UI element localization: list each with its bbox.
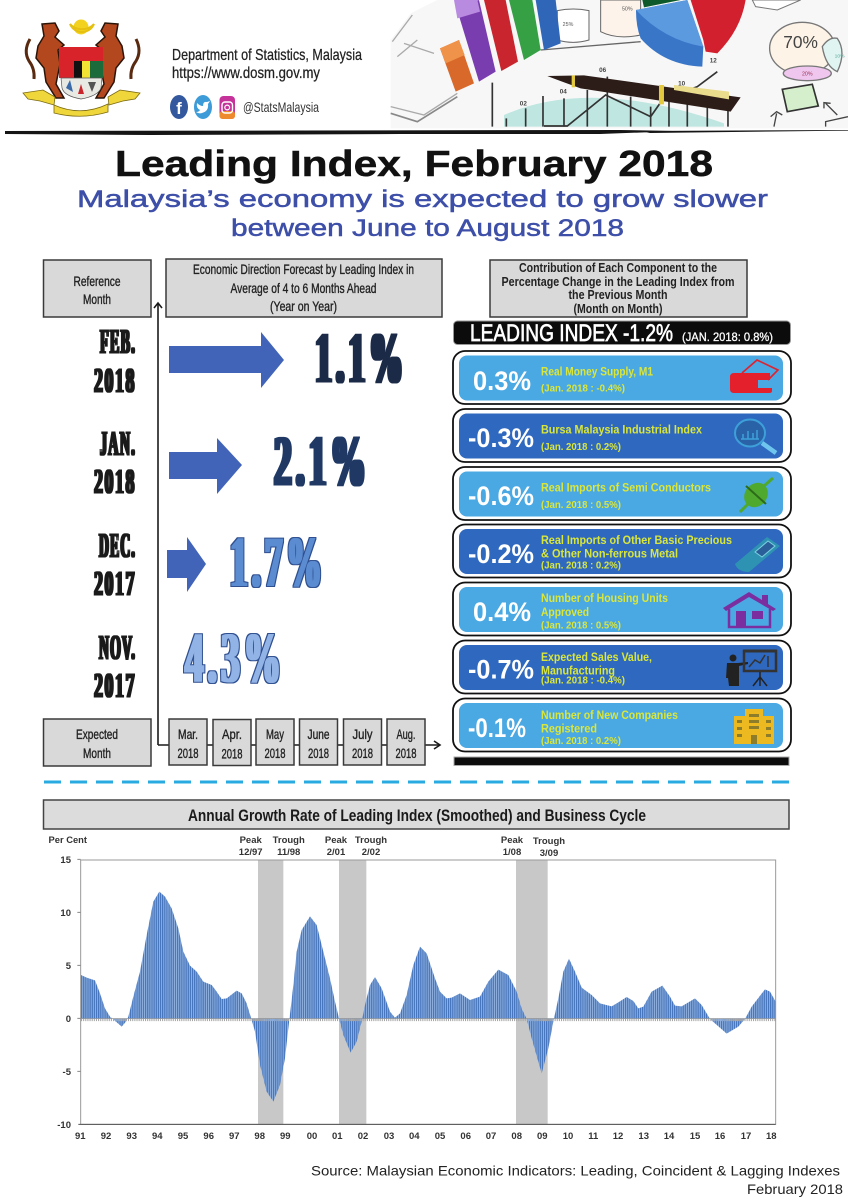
chart heading (44, 800, 789, 829)
decorative business chart photo: 50% (622, 7, 633, 13)
organisation name and website: https://www.dosm.gov.my (172, 65, 320, 82)
leading index banner: (JAN. 2018: 0.8%) (682, 330, 773, 344)
expected month timeline: 2018 (308, 745, 329, 761)
expected month timeline: Aug. (396, 726, 416, 742)
peak and trough labels: 3/09 (540, 848, 558, 859)
icon: green plug (739, 478, 773, 512)
peak and trough labels: Peak (325, 835, 348, 846)
card: semi conductors (453, 467, 791, 520)
leading index banner: LEADING INDEX -1.2% (470, 320, 673, 347)
card: real money supply: Real Money Supply, M1 (541, 364, 653, 378)
x axis labels: 13 (638, 1131, 649, 1142)
expected month timeline: 2018 (352, 745, 373, 761)
card: Bursa Malaysia: Bursa Malaysia Industrial Index (541, 422, 702, 436)
row: Nov 2017: 2017 (94, 666, 136, 705)
x axis labels: 04 (409, 1131, 420, 1142)
chart heading: Annual Growth Rate of Leading Index (Smoothed) and Business Cycle (188, 806, 646, 825)
card: precious metal: (Jan. 2018 : 0.2%) (541, 560, 621, 572)
forecast heading: Economic Direction Forecast by Leading Index in (193, 261, 414, 277)
peak and trough labels: Trough (355, 835, 387, 846)
axis arrows (154, 303, 440, 749)
contribution heading: Contribution of Each Component to the (519, 261, 717, 275)
expected month timeline: May (266, 726, 284, 742)
forecast heading: Average of 4 to 6 Months Ahead (230, 280, 376, 296)
x axis labels: 99 (280, 1131, 291, 1142)
panel: economic direction forecast: 1.7% (230, 522, 326, 602)
expected month heading: Expected (76, 726, 118, 742)
x axis labels: 97 (229, 1131, 240, 1142)
card: new companies: -0.1% (468, 713, 526, 743)
panel: economic direction forecast: 2.1% (274, 421, 370, 501)
card: precious metal: Real Imports of Other Basic Precious (541, 533, 732, 547)
y axis labels: 0 (66, 1014, 71, 1025)
decorative business chart photo (391, 0, 848, 128)
contribution heading: (Month on Month) (574, 302, 662, 316)
x axis labels: 02 (358, 1131, 368, 1142)
row: Jan 2018: 2018 (94, 462, 136, 501)
source note: Source: Malaysian Economic Indicators: Leading, Coincident & Lagging Indexes (311, 1162, 840, 1178)
card: semi conductors: (Jan. 2018 : 0.5%) (541, 499, 621, 511)
closing bar (454, 757, 789, 766)
card: expected sales value: Manufacturing (541, 664, 615, 678)
row: Jan 2018 (94, 421, 370, 501)
expected month timeline: Apr. (222, 726, 242, 742)
x axis labels: 91 (75, 1131, 86, 1142)
forecast heading (166, 259, 442, 317)
expected month timeline: 2018 (178, 745, 199, 761)
x axis labels: 15 (690, 1131, 701, 1142)
subtitle: Malaysia’s economy is expected to grow slower (77, 186, 768, 213)
social media icons and handle (170, 95, 319, 119)
plot frame (81, 860, 776, 1124)
peak and trough labels: Peak (240, 835, 263, 846)
x axis labels: 98 (254, 1131, 265, 1142)
decorative business chart photo: 70% (783, 32, 818, 52)
x axis labels: 06 (460, 1131, 471, 1142)
decorative business chart photo: 02 (520, 100, 527, 107)
header banner (5, 0, 848, 135)
x axis labels: 01 (332, 1131, 343, 1142)
y axis labels: -10 (57, 1120, 71, 1131)
decorative business chart photo: 12 (710, 57, 717, 64)
decorative business chart photo: 10 (678, 81, 686, 88)
card: housing units (453, 582, 791, 636)
card: precious metal (453, 524, 791, 578)
bar chart: annual growth rate and business cycle (48, 835, 777, 1142)
card: real money supply: 0.3% (473, 366, 531, 396)
card: expected sales value: Expected Sales Value, (541, 650, 652, 664)
peak and trough labels (239, 835, 565, 859)
x axis labels: 12 (613, 1131, 623, 1142)
card: housing units: Approved (541, 605, 589, 619)
icon: yellow building (734, 709, 774, 744)
card: new companies: (Jan. 2018 : 0.2%) (541, 735, 621, 747)
card: Bursa Malaysia: (Jan. 2018 : 0.2%) (541, 441, 621, 453)
peak and trough labels: 2/01 (327, 847, 346, 858)
expected month timeline: June (308, 726, 330, 742)
card: semi conductors: Real Imports of Semi Conductors (541, 480, 711, 494)
y axis labels: 10 (60, 908, 71, 919)
panel: economic direction forecast: 1.1% (315, 318, 407, 398)
decorative business chart photo: 10% (835, 54, 845, 60)
x axis labels: 93 (126, 1131, 137, 1142)
x axis labels: 17 (741, 1131, 751, 1142)
card: housing units: (Jan. 2018 : 0.5%) (541, 620, 621, 632)
social media icons and handle: @StatsMalaysia (243, 99, 319, 115)
x axis labels (75, 1131, 777, 1142)
card: housing units: 0.4% (473, 597, 531, 627)
recession bands (258, 860, 548, 1124)
expected month timeline: Mar. (178, 726, 198, 742)
decorative business chart photo: 25% (563, 22, 574, 28)
x axis labels: 18 (766, 1131, 777, 1142)
card: new companies: Registered (541, 722, 597, 736)
card: housing units: Number of Housing Units (541, 591, 668, 605)
x axis labels: 11 (588, 1131, 599, 1142)
x axis labels: 95 (178, 1131, 189, 1142)
card: expected sales value: -0.7% (468, 654, 534, 684)
x axis labels: 92 (101, 1131, 111, 1142)
expected month timeline: July (352, 726, 372, 742)
peak and trough labels: Peak (501, 835, 524, 846)
peak and trough labels: 2/02 (362, 847, 380, 858)
panel: contribution of each component (453, 260, 791, 766)
reference month heading: Month (83, 291, 111, 307)
expected month timeline: 2018 (264, 745, 286, 761)
card: real money supply: (Jan. 2018 : -0.4%) (541, 382, 625, 394)
expected month heading (44, 719, 151, 766)
peak and trough labels: 1/08 (503, 847, 521, 858)
row: Nov 2017 (94, 618, 285, 705)
decorative business chart photo: 20% (802, 71, 813, 77)
x axis labels: 05 (435, 1131, 446, 1142)
y axis labels: 5 (66, 961, 72, 972)
source note: February 2018 (747, 1181, 843, 1197)
social media icons and handle: f (176, 99, 182, 118)
row: Dec 2017: 2017 (94, 564, 136, 603)
card: Bursa Malaysia: -0.3% (468, 423, 534, 453)
decorative business chart photo: 04 (560, 89, 567, 96)
reference month heading (44, 260, 151, 317)
icon: national coat of arms (23, 20, 140, 116)
x axis labels: 08 (511, 1131, 522, 1142)
y axis labels: -5 (63, 1067, 72, 1078)
y axis labels: Per Cent (48, 835, 88, 846)
card: precious metal: & Other Non-ferrous Metal (541, 546, 678, 560)
row: Feb 2018: FEB. (100, 322, 136, 361)
card: precious metal: -0.2% (468, 539, 534, 569)
card: Bursa Malaysia (453, 409, 791, 462)
y axis labels: 15 (60, 855, 72, 866)
x axis labels: 94 (152, 1131, 163, 1142)
peak and trough labels: Trough (273, 835, 305, 846)
panel: economic direction forecast (44, 259, 442, 766)
forecast heading: (Year on Year) (270, 298, 337, 314)
contribution heading: Percentage Change in the Leading Index from (502, 275, 734, 289)
peak and trough labels: 12/97 (239, 847, 263, 858)
reference month heading: Reference (74, 273, 121, 289)
expected month timeline (169, 719, 425, 766)
subtitle (77, 186, 768, 242)
decorative business chart photo: 06 (599, 67, 607, 74)
card: expected sales value (453, 640, 791, 694)
growth rate bars (81, 892, 776, 1102)
expected month heading: Month (83, 745, 111, 761)
contribution heading: the Previous Month (568, 288, 668, 302)
icon: metal device (735, 537, 780, 572)
brush stroke divider (5, 130, 848, 135)
x axis labels: 14 (664, 1131, 675, 1142)
row: Dec 2017 (94, 522, 326, 603)
expected month timeline: 2018 (222, 746, 243, 762)
x axis labels: 03 (384, 1131, 394, 1142)
contribution heading (490, 260, 747, 317)
card: semi conductors: -0.6% (468, 481, 534, 511)
icon: magnifier with chart (735, 420, 776, 453)
x axis labels: 96 (203, 1131, 214, 1142)
source note (311, 1162, 843, 1197)
x axis labels: 07 (486, 1131, 496, 1142)
row: Jan 2018: JAN. (100, 424, 136, 463)
organisation name and website (172, 47, 362, 82)
card: expected sales value: (Jan. 2018 : -0.4%) (541, 674, 625, 686)
icon: presenter and board (726, 651, 777, 686)
card: new companies: Number of New Companies (541, 708, 678, 722)
y axis labels (48, 835, 88, 1131)
row: Feb 2018 (94, 318, 407, 400)
row: Dec 2017: DEC. (99, 526, 136, 565)
expected month timeline: 2018 (396, 745, 417, 761)
icon: purple house (723, 592, 776, 627)
organisation name and website: Department of Statistics, Malaysia (172, 47, 362, 64)
row: Nov 2017: 4.3% (185, 618, 285, 698)
title: Leading Index, February 2018 (115, 143, 713, 184)
peak and trough labels: 11/98 (277, 847, 300, 858)
x axis labels: 10 (563, 1131, 573, 1142)
card: real money supply (453, 351, 791, 404)
x axis labels: 09 (537, 1131, 548, 1142)
row: Feb 2018: 2018 (94, 361, 136, 400)
card: new companies (453, 698, 791, 752)
x axis labels: 00 (307, 1131, 317, 1142)
peak and trough labels: Trough (533, 836, 565, 847)
subtitle: between June to August 2018 (231, 215, 624, 242)
row: Nov 2017: NOV. (99, 628, 136, 667)
icon: red wallet (730, 360, 778, 393)
x axis labels: 16 (715, 1131, 725, 1142)
